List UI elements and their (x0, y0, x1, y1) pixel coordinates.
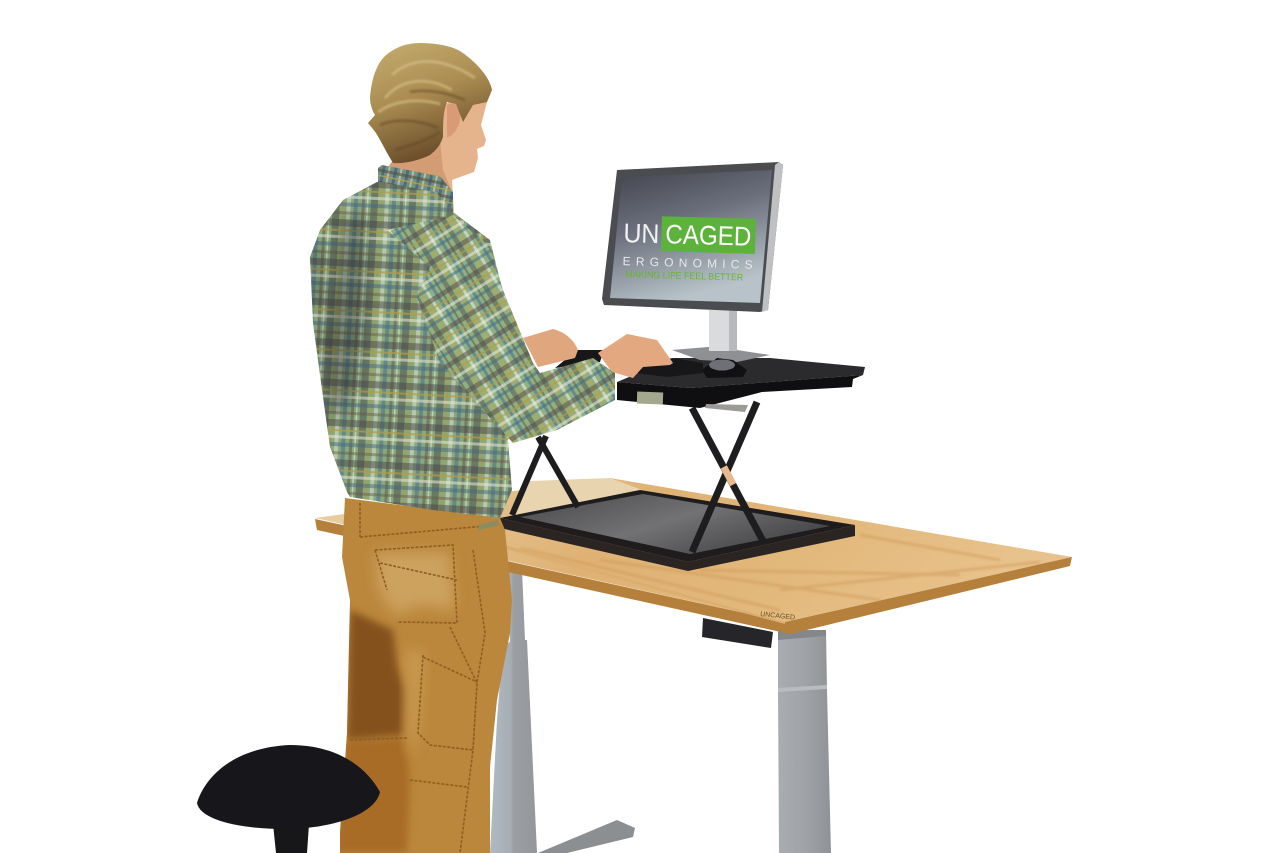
hair strands (378, 62, 475, 112)
hand: left on keyboard (523, 329, 578, 367)
monitor bezel (602, 162, 783, 312)
man (310, 43, 673, 853)
head and neck (368, 43, 492, 212)
monitor logo: MAKING LIFE FEEL BETTER (625, 269, 744, 283)
balance stool (197, 745, 380, 853)
desk top (315, 478, 1072, 634)
hair (368, 43, 492, 163)
shirt dark fold shading (311, 218, 364, 420)
platform sticker (637, 392, 663, 404)
desk leg: right (778, 630, 831, 853)
desk logo mark: UNCAGED (760, 611, 795, 622)
keyboard (555, 350, 703, 377)
desk controller box (702, 618, 773, 648)
monitor logo: ERGONOMICS (622, 254, 753, 272)
desk leg: left with foot (490, 570, 635, 853)
monitor logo (622, 215, 756, 284)
monitor screen (610, 170, 772, 303)
riser platform (617, 358, 865, 412)
riser base tray (500, 490, 855, 571)
ear (447, 103, 460, 137)
shirt body (310, 165, 615, 518)
standing desk (315, 478, 1072, 853)
hand: right on keyboard (598, 334, 673, 378)
monitor logo: CAGED (665, 219, 752, 252)
desk riser (500, 358, 865, 571)
monitor (602, 162, 783, 362)
pants back pocket stitching (360, 503, 497, 623)
riser x-frame: right (692, 402, 763, 552)
shirt sleeve (387, 215, 615, 443)
pants shading (335, 552, 455, 853)
pants waist tag (478, 520, 498, 530)
photo scene: man at standing desk (197, 43, 1072, 853)
pants leg pocket stitching (350, 550, 485, 853)
riser x-frame: left (512, 436, 578, 515)
mouse (702, 358, 747, 378)
shirt collar (378, 165, 453, 212)
monitor stand (672, 310, 770, 362)
desk wood grain (520, 535, 1040, 610)
monitor logo: UN (623, 218, 660, 249)
pants (335, 498, 512, 853)
